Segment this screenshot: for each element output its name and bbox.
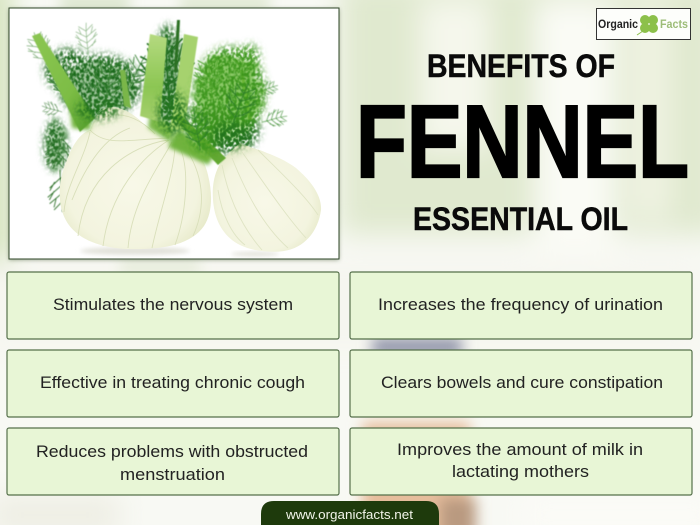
fronds: front dark accents xyxy=(76,90,252,150)
logo: Organic Facts xyxy=(596,8,690,40)
panel: benefit 5: Reduces problems with obstructed xyxy=(36,442,308,461)
panel: benefit 4 xyxy=(350,350,692,417)
panel: benefit 5: menstruation xyxy=(120,465,225,484)
panel: benefit 2: Increases the frequency of urination xyxy=(378,295,663,314)
footer: website badge: www.organicfacts.net xyxy=(285,507,413,522)
title: Essential Oil: ESSENTIAL OIL xyxy=(413,201,628,237)
green bulb necks xyxy=(70,108,215,165)
panel: benefit 4: Clears bowels and cure constipation xyxy=(381,373,663,392)
fronds: dense dark mass xyxy=(44,24,260,171)
stalks xyxy=(32,20,252,165)
fronds: front accents xyxy=(179,43,262,152)
fronds: soft underlayer xyxy=(47,30,262,169)
title: Benefits of: BENEFITS OF xyxy=(427,48,615,84)
panel: benefit 5 xyxy=(7,428,339,495)
bulb shadows xyxy=(80,247,279,256)
icon: fennel illustration xyxy=(22,20,321,256)
panel: fennel photo xyxy=(9,8,339,260)
bulb: small xyxy=(213,143,321,252)
logo wordmark: Facts: Facts xyxy=(660,17,688,31)
panel: benefit 2 xyxy=(350,272,692,339)
bulb: large xyxy=(60,107,211,249)
fine wispy fronds xyxy=(22,22,289,213)
fronds: bright mass xyxy=(186,44,266,153)
logo wordmark: Organic: Organic xyxy=(598,17,638,31)
panel: benefit 6: lactating mothers xyxy=(452,462,589,481)
panel: benefit 6: Improves the amount of milk in xyxy=(397,440,643,459)
panel: benefit 6 xyxy=(350,428,692,495)
icon: clover leaf xyxy=(637,15,658,35)
panel: benefit 1: Stimulates the nervous system xyxy=(53,295,293,314)
fronds: bright underlayer xyxy=(192,54,260,147)
footer: website badge xyxy=(261,501,439,525)
panel: benefit 3: Effective in treating chronic cough xyxy=(40,373,305,392)
panel: benefit 3 xyxy=(7,350,339,417)
panel: benefit 1 xyxy=(7,272,339,339)
